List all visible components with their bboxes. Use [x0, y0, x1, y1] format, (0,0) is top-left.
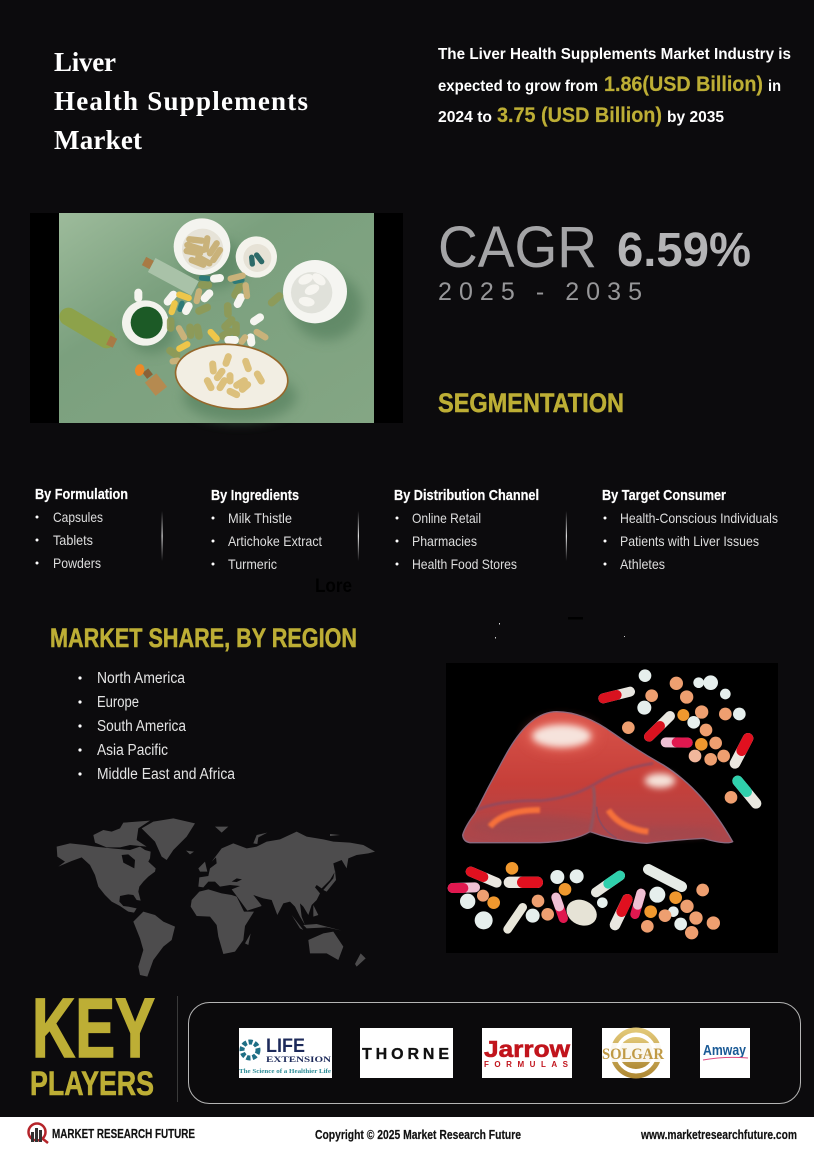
- logo: Thorne: [360, 1028, 453, 1078]
- segment column: by formulation: [35, 486, 128, 571]
- CAGR value: [438, 215, 751, 280]
- market growth statement: by 2035: [667, 109, 724, 126]
- bowl 1: [174, 218, 230, 275]
- glass vial: [152, 265, 195, 288]
- oval plate: [172, 339, 291, 414]
- market growth statement: [438, 46, 791, 127]
- segment column: by formulation: By Formulation: [35, 486, 128, 503]
- segment column: by distribution channel: By Distribution Channel: [394, 487, 539, 504]
- footer bar: [0, 1117, 814, 1150]
- segment column: by distribution channel: [394, 487, 539, 572]
- segment column: by target consumer: Health-Conscious Individuals: [620, 510, 778, 526]
- region list: South America: [97, 718, 186, 735]
- logo: market research future: MARKET RESEARCH FUTURE: [52, 1126, 195, 1141]
- market growth statement: in: [768, 78, 781, 95]
- world map: [57, 818, 375, 977]
- title: [54, 47, 308, 155]
- region list: North America: [97, 670, 185, 687]
- green bowl: [122, 300, 169, 346]
- segment column: by ingredients: By Ingredients: [211, 487, 299, 504]
- region list: [78, 670, 235, 783]
- segment column: by formulation: Capsules: [53, 509, 103, 525]
- segment column: by ingredients: Turmeric: [228, 556, 277, 572]
- market growth statement: 3.75 (USD Billion): [497, 104, 662, 127]
- logo: Life Extension: EXTENSION: [266, 1055, 331, 1064]
- logo: Life Extension: [239, 1028, 332, 1078]
- CAGR value: 6.59%: [617, 224, 751, 277]
- CAGR value: CAGR: [438, 215, 597, 280]
- panel: company logos: [188, 1002, 800, 1104]
- logo: Solgar: SOLGAR: [602, 1046, 664, 1063]
- heading: segmentation: SEGMENTATION: [438, 388, 624, 418]
- logo: Life Extension: LIFE: [266, 1036, 305, 1057]
- title: Liver: [54, 47, 116, 77]
- region list: Middle East and Africa: [97, 766, 235, 783]
- logo: Jarrow Formulas: Jarrow: [484, 1036, 570, 1062]
- segment column: by formulation: Powders: [53, 555, 101, 571]
- segment column: by ingredients: Artichoke Extract: [228, 533, 322, 549]
- segment column: by formulation: Tablets: [53, 532, 93, 548]
- market growth statement: 1.86(USD Billion): [604, 73, 763, 96]
- bowl 2: [236, 236, 277, 278]
- loose pills: [138, 276, 279, 361]
- logo: Amway: Amway: [703, 1042, 747, 1059]
- market growth statement: 2024 to: [438, 109, 492, 126]
- title: Market: [54, 125, 142, 155]
- region list: Asia Pacific: [97, 742, 168, 759]
- segment column: by distribution channel: Pharmacies: [412, 533, 477, 549]
- forecast years: 2025 - 2035: [438, 278, 642, 306]
- segment column: by target consumer: By Target Consumer: [602, 487, 726, 504]
- segment column: by target consumer: Athletes: [620, 556, 665, 572]
- copyright: Copyright © 2025 Market Research Future: [315, 1127, 521, 1142]
- market growth statement: expected to grow from: [438, 78, 598, 95]
- capsules: [453, 692, 756, 929]
- logo: Thorne: THORNE: [362, 1046, 449, 1063]
- photo: supplements on green background: [30, 213, 403, 423]
- liver: [463, 712, 733, 843]
- heading: key players: PLAYERS: [30, 1065, 154, 1103]
- market growth statement: The Liver Health Supplements Market Industry is: [438, 46, 791, 63]
- logo: Life Extension: The Science of a Healthier Life: [239, 1068, 331, 1075]
- faint hidden text: Lore: [315, 576, 352, 597]
- logo: market research future: [28, 1124, 195, 1143]
- segment column: by target consumer: [602, 487, 778, 572]
- segment column: by ingredients: Milk Thistle: [228, 510, 292, 526]
- region list: Europe: [97, 694, 139, 711]
- segment column: by target consumer: Patients with Liver Issues: [620, 533, 759, 549]
- powder vial: [68, 317, 107, 339]
- amber bottle: [151, 378, 161, 391]
- logo: Jarrow Formulas: FORMULAS: [484, 1060, 569, 1069]
- illustration: liver and pills: [446, 663, 778, 953]
- logo: Amway: [700, 1028, 750, 1078]
- heading: market share by region: MARKET SHARE, BY REGION: [50, 623, 357, 653]
- segment column: by distribution channel: Health Food Stores: [412, 556, 517, 572]
- bowl 3: [283, 260, 347, 323]
- segment column: by distribution channel: Online Retail: [412, 510, 481, 526]
- heading: key players: KEY: [32, 981, 155, 1075]
- tablets: [460, 669, 746, 939]
- logo: Jarrow Formulas: [482, 1028, 572, 1078]
- heading: key players: [30, 981, 155, 1103]
- title: Health Supplements: [54, 86, 308, 116]
- logo: Solgar: [602, 1028, 670, 1078]
- segment column: by ingredients: [211, 487, 322, 572]
